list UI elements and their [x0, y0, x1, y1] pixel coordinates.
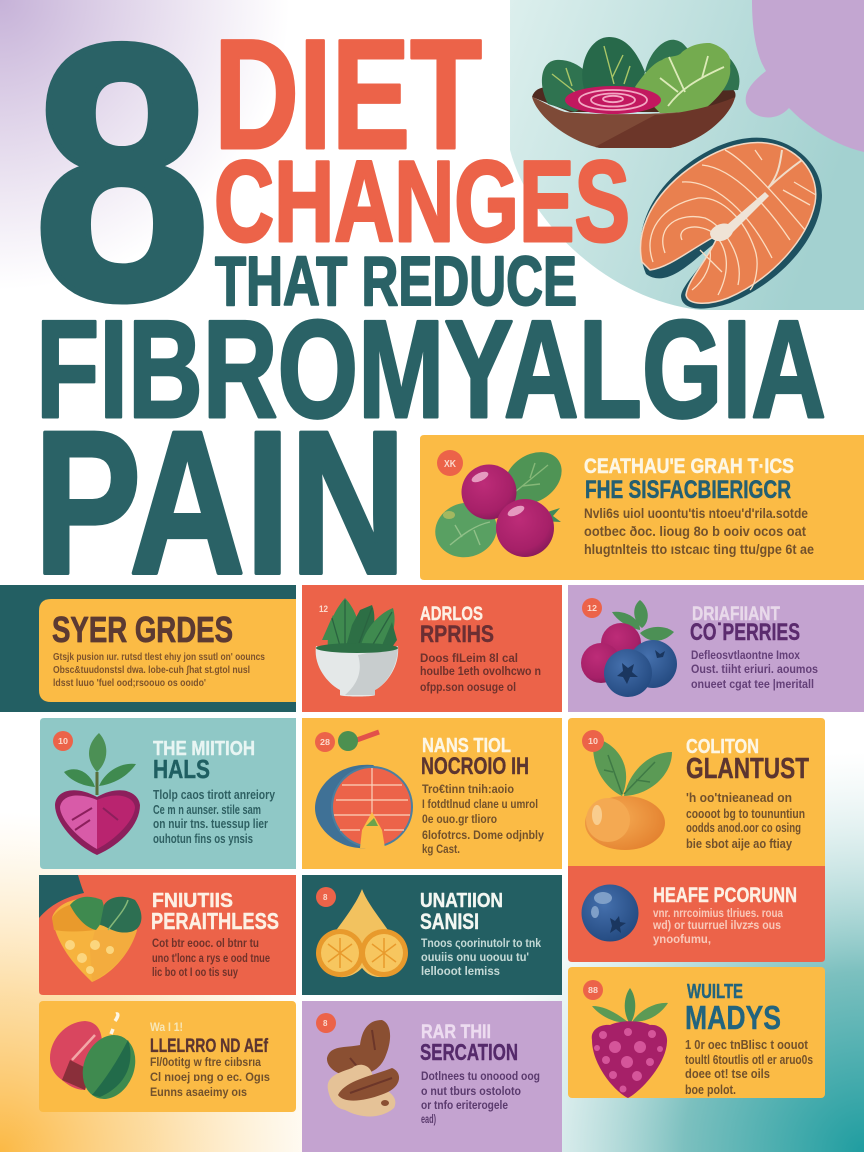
body text: [422, 782, 544, 856]
icon: fruit and leaf: [50, 1014, 145, 1107]
icon: pear and slices: [316, 889, 408, 977]
body text: Cot btr eooc. ol btnr tu: [152, 936, 259, 950]
body text: [420, 653, 541, 694]
heading: HEAFE PCORUNN: [653, 884, 797, 907]
body text: Eunns asaeimy oıs: [150, 1085, 247, 1099]
body text: [53, 651, 265, 689]
panel: fnimtiis peraitfless: [39, 875, 296, 995]
body text: ouuiis onu uoouu tu': [421, 950, 529, 964]
number badge: 10: [588, 737, 599, 746]
body text: [584, 505, 814, 557]
panel: rar thii sercation: [302, 1001, 562, 1152]
heading: RAR THII: [421, 1022, 491, 1043]
number badge: 12: [587, 604, 598, 613]
heading: [153, 738, 255, 784]
body text: toultl 6toutlis otl er aruo0s: [685, 1053, 813, 1067]
body text: Tnoos ςoorinutolr to tnk: [421, 936, 541, 950]
purple blob: [746, 0, 864, 152]
heading: DRIAFIIANT: [692, 604, 780, 625]
body text: 'h oo'tnieanead on: [686, 791, 792, 805]
body text: [152, 936, 270, 979]
icon: mixed nuts: [327, 1020, 399, 1116]
heading: [584, 455, 794, 504]
title: changes: CHANGES: [214, 138, 630, 266]
body text: vnr. nrrcoimius tlriues. roua: [653, 908, 784, 920]
body text: [691, 650, 818, 691]
body text: on nuir tns. tuessup lier: [153, 817, 268, 831]
icon: raspberry: [592, 988, 668, 1098]
icon: salmon steak: [640, 138, 822, 309]
heading: [420, 890, 503, 934]
panel: the miitioh hals: [40, 718, 296, 869]
body text: wd) or tuurruel ilvz≠s ous: [652, 920, 781, 932]
body text: or tnfo eriterogele: [421, 1098, 508, 1112]
number badge: [583, 980, 603, 1000]
body text: [421, 1069, 540, 1126]
body text: Ce m n aunser. stile sam: [153, 803, 261, 817]
panel: co-perries: [568, 585, 864, 712]
title: pain: PAIN: [34, 389, 406, 617]
icon: beet heart: [55, 733, 140, 855]
panel: coliton glantust: [568, 718, 825, 866]
body text: I fotdtlnud clane u umrol: [422, 797, 538, 811]
number badge: [437, 450, 463, 476]
body text: 1 0r oec tnBIisc t oouot: [685, 1038, 809, 1052]
number badge: [316, 1013, 336, 1033]
number badge: [582, 730, 604, 752]
title: diet: DIET: [214, 8, 482, 182]
heading: SYER GRDES: [52, 609, 233, 650]
body text: kg Cast.: [422, 842, 460, 856]
body text: [686, 791, 805, 851]
body text: ynoofumu,: [653, 934, 711, 946]
body text: [153, 788, 275, 846]
heading: [686, 736, 809, 785]
icon: mixed berries: [581, 600, 677, 697]
body text: bie sbot aije ao ftiay: [686, 837, 792, 851]
body text: Nvli6s uiol uoontu'tis ntoeu'd'rila.sotde: [584, 505, 808, 521]
number badge: 8: [323, 1019, 328, 1028]
icon: peach with leaves: [585, 738, 672, 850]
number badge: 88: [588, 986, 599, 995]
body text: [421, 936, 541, 978]
body text: lellooot lemiss: [421, 964, 500, 978]
heading: CEATHAU'E GRAH T·ICS: [584, 455, 794, 478]
heading: CO˙PERRIES: [690, 619, 800, 646]
heading: HALS: [153, 754, 210, 784]
panel: wuilte madys: [568, 967, 825, 1098]
body text: doee ot! tse oils: [685, 1067, 770, 1081]
heading: WUILTE: [687, 981, 743, 1003]
heading: GLANTUST: [686, 753, 809, 785]
heading: [420, 604, 494, 648]
number badge and spoon: 28: [320, 738, 331, 747]
body text: 0e ouo.gr tlioro: [422, 812, 497, 826]
number badge: [53, 731, 73, 751]
top right teal panel: [510, 0, 864, 310]
heading: ADRLOS: [420, 604, 483, 625]
icon: salad bowl with beet: [532, 37, 739, 148]
body text: [150, 1055, 270, 1099]
body text: Oust. tiiht eriuri. aoumos: [691, 664, 818, 676]
number badge: [582, 598, 602, 618]
body text: Cl nıoej ɒng o ec. Ogıs: [150, 1070, 270, 1084]
number badge: XK: [444, 459, 457, 470]
heading: Wa I 1!: [150, 1020, 183, 1034]
body text: [652, 908, 784, 946]
body text: oodds anod.oor co osing: [686, 821, 801, 835]
body text: ead): [421, 1112, 436, 1126]
body text: ldsst luuo 'fuel ood;rsoouo os ooıdo': [53, 677, 206, 689]
heading: COLITON: [686, 736, 759, 758]
body text: hlugtnlteis tto ıstcaıc ting ttu/gpe 6t ae: [584, 541, 814, 557]
body text: Defleosvtlaontne Imox: [691, 650, 801, 662]
heading: [685, 981, 781, 1036]
icon: citrus and greens: [52, 897, 141, 982]
corner accent: [39, 875, 84, 918]
icon: salmon cross-section: [315, 765, 412, 848]
body text: [685, 1038, 813, 1097]
heading: FHE SISFACBIERIGCR: [585, 476, 791, 504]
body text: Fl/0otitg w ftre ciıbsrıa: [150, 1055, 261, 1069]
body text: onueet cgat tee |meritall: [691, 679, 814, 691]
panel: cranberries: [420, 435, 864, 580]
panel: unatiion sanisi: [302, 875, 562, 995]
body text: o nut tburs ostoloto: [421, 1084, 521, 1098]
number badge and spoon: [315, 731, 379, 752]
heading: MADYS: [685, 999, 781, 1036]
body text: Tro€tinn tnih:aoio: [422, 782, 514, 796]
icon: blueberry: [582, 884, 638, 942]
heading: UNATIION: [420, 890, 503, 912]
body text: coooot bg to toununtiun: [686, 807, 805, 821]
body text: boe polot.: [685, 1083, 736, 1097]
number badge: 8: [323, 893, 328, 902]
number badge: [316, 887, 336, 907]
heading: FNIUTIIS: [152, 890, 233, 912]
body text: Tlolp caos tirott anreiory: [153, 788, 275, 802]
body text: ofpp.son oosuge ol: [420, 682, 516, 694]
body text: Obsc&tuudonstsl dwa. lobe-cuh ʃhat st.gtol nusl: [53, 664, 250, 676]
title: that reduce: THAT REDUCE: [215, 242, 577, 320]
heading: NOCROIO IH: [421, 753, 529, 780]
heading: PERAITHLESS: [151, 908, 279, 934]
panel: syer grdes: [0, 585, 296, 712]
heading: [151, 890, 279, 934]
panel: heafe pcorunn: [568, 866, 825, 962]
icon: berries and leaves: [429, 441, 572, 564]
heading: SANISI: [420, 909, 479, 934]
body text: uno t'lonc a rys e ood tnue: [152, 951, 270, 965]
heading: [421, 735, 529, 780]
panel: adrlos rprihs: [302, 585, 562, 712]
panel: nans tiol: [302, 718, 562, 869]
body text: Dotlnees tu onoood oog: [421, 1069, 540, 1083]
heading: RPRIHS: [420, 621, 494, 648]
body text: houlbe 1eth ovolhcwo n: [420, 666, 541, 678]
title: [33, 0, 826, 617]
heading: SERCATION: [420, 1039, 518, 1065]
number badge: 12: [319, 604, 328, 614]
body text: Doos fILeim 8l cal: [420, 653, 518, 665]
body text: ouhotun fins os ynsis: [153, 832, 253, 846]
heading: [690, 604, 800, 646]
icon: leaf bowl: [316, 598, 398, 696]
heading: LLELRRO ND AEf: [150, 1036, 268, 1057]
body text: lic bo ot I oo tis suy: [152, 965, 238, 979]
body text: 6lofotrcs. Dome odjnbly: [422, 828, 544, 842]
number badge: 10: [58, 737, 69, 746]
body text: ootbec ðoc. lioug 8o b ooiv ocos oat: [584, 523, 806, 539]
heading: THE MIITIOH: [153, 738, 255, 760]
panel: lelrro nd aef: [39, 1001, 296, 1112]
heading: [420, 1022, 518, 1065]
heading: [150, 1020, 268, 1057]
body text: Gtsjk pusion ıur. rutsd tlest ehıy jon ssutl on' oouncs: [53, 651, 265, 663]
heading: NANS TIOL: [422, 735, 511, 757]
